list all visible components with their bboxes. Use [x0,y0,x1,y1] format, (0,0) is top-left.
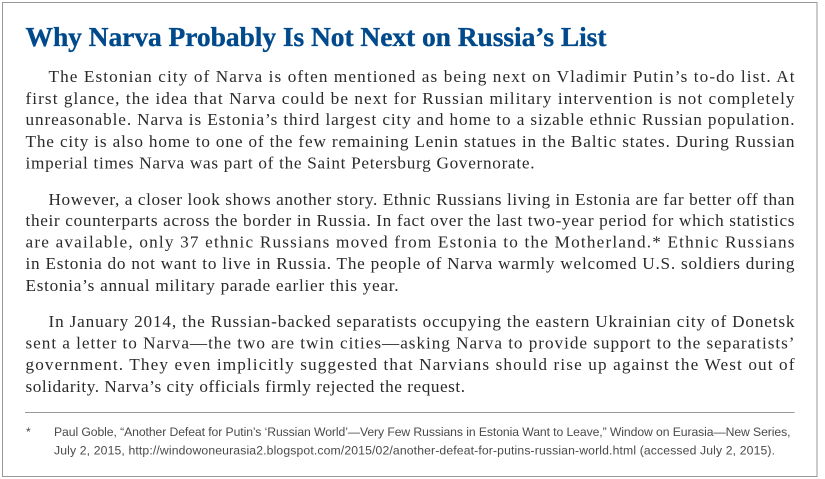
paragraph 2 [26,190,795,295]
paragraph 2: Estonia’s annual military parade earlier this year. [26,276,398,295]
paragraph 1 [26,67,795,172]
paragraph 2: are available, only 37 ethnic Russians moved from Estonia to the Motherland.* Ethnic Russians [26,232,795,252]
paragraph 3 [26,312,795,396]
paragraph 3: sent a letter to Narva—the two are twin cities—asking Narva to provide support to the separatists’ [26,334,794,352]
paragraph 1: The city is also home to one of the few remaining Lenin statues in the Baltic states. During Russian [26,132,795,151]
paragraph 3: In January 2014, the Russian-backed separatists occupying the eastern Ukrainian city of Donetsk [48,312,795,331]
footnote: July 2, 2015, http://windowoneurasia2.blogspot.com/2015/02/another-defeat-for-putins-russian-world.html (accessed July 2, 2015). [54,444,775,458]
paragraph 1: first glance, the idea that Narva could be next for Russian military intervention is not completely [26,89,795,108]
paragraph 2: their counterparts across the border in Russia. In fact over the last two-year period for which statistics [26,211,795,230]
paragraph 1: imperial times Narva was part of the Saint Petersburg Governorate. [26,154,534,172]
paragraph 1: The Estonian city of Narva is often mentioned as being next on Vladimir Putin’s to-do list. At [48,67,795,86]
paragraph 3: government. They even implicitly suggested that Narvians should rise up against the West out of [26,355,795,374]
footnote: * [26,425,31,439]
paragraph 2: However, a closer look shows another story. Ethnic Russians living in Estonia are far better off than [48,190,795,209]
footnote: Paul Goble, “Another Defeat for Putin’s ‘Russian World’—Very Few Russians in Estonia Want to Leave,” Window on Eurasia—New Series, [54,425,790,439]
footnote [26,425,790,458]
title: Why Narva Probably Is Not Next on Russia’s List [26,21,607,52]
paragraph 2: in Estonia do not want to live in Russia. The people of Narva warmly welcomed U.S. soldiers during [26,254,795,273]
paragraph 3: solidarity. Narva’s city officials firmly rejected the request. [26,377,465,396]
paragraph 1: unreasonable. Narva is Estonia’s third largest city and home to a sizable ethnic Russian population. [26,110,794,129]
